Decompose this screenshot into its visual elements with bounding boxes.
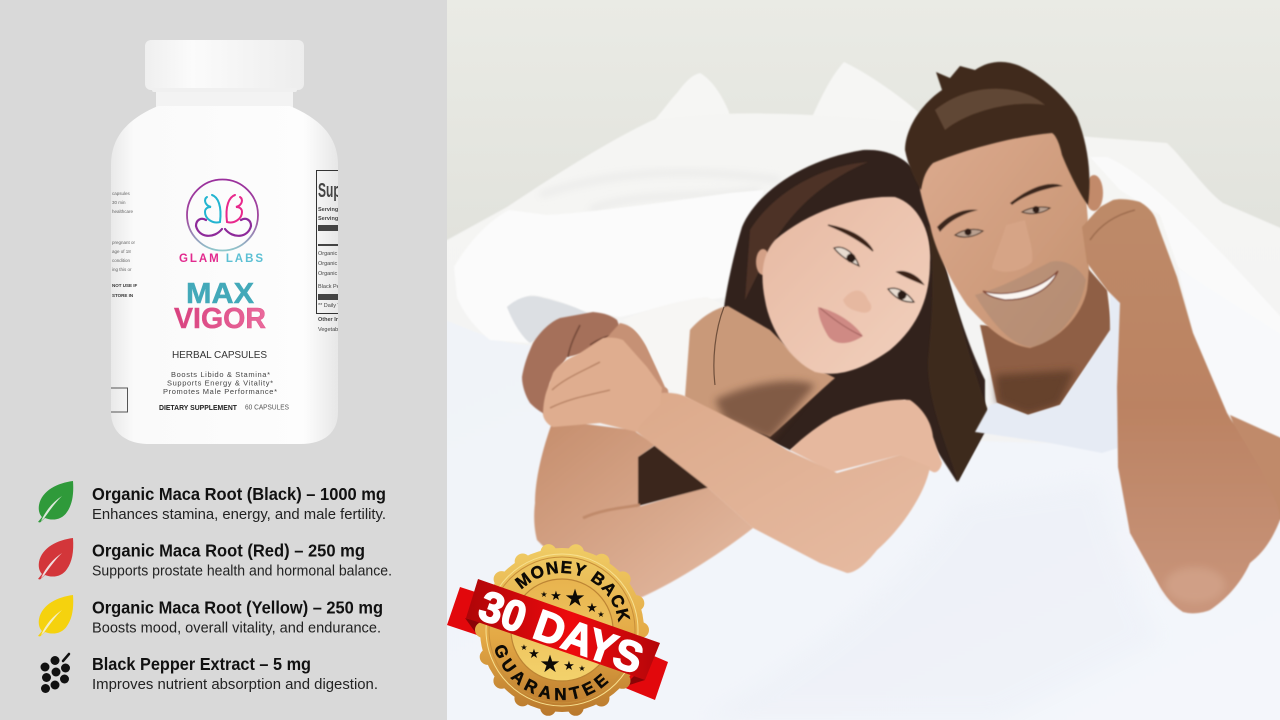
bottle side warning text: NOT USE IF [112, 283, 138, 288]
supplement facts label: Servings Per [318, 216, 352, 222]
panel: product and ingredients [38, 40, 391, 693]
supplement facts label [316, 170, 338, 332]
near arm from elbow to crossing [534, 420, 753, 598]
product bottle [111, 40, 338, 444]
icon: green leaf [38, 481, 73, 522]
gold seal [480, 548, 644, 712]
bottle side warning text: pregnant or [112, 240, 136, 245]
woman's hair highlight [745, 162, 868, 300]
ingredient name: Organic Maca Root (Yellow) – 250 mg [92, 598, 383, 618]
product benefits: Supports Energy & Vitality* [167, 378, 273, 388]
far upper arm and forearm [625, 393, 930, 573]
product name: vigor: VIGOR [174, 303, 266, 335]
woman's front hair strand [927, 225, 990, 482]
elbow highlight [1165, 567, 1225, 603]
stars: ★ [586, 600, 598, 615]
duvet back [440, 113, 1280, 460]
bottle side warning text: STORE IN [112, 293, 133, 298]
stars: ★ [563, 658, 575, 673]
man's neck [980, 265, 1112, 415]
woman's shoulder [606, 322, 670, 394]
woman's arms [534, 338, 942, 598]
woman's face [762, 197, 930, 374]
man's hair [905, 62, 1090, 205]
stars: ★ [597, 610, 605, 619]
ingredient benefit: Supports prostate health and hormonal balance. [92, 563, 392, 580]
product benefits: Boosts Libido & Stamina* [171, 370, 270, 379]
ribbon tails [447, 587, 668, 700]
supplement facts label: Serving Size [318, 207, 351, 213]
bottle side warning text: healthcare [112, 209, 134, 214]
product name: max: MAX [186, 278, 255, 310]
stars: ★ [564, 585, 586, 612]
man's mouth [983, 271, 1058, 300]
stars: ★ [539, 651, 561, 678]
bottle neck [156, 88, 293, 112]
brand name: GLAM LABS [179, 253, 263, 265]
stars [520, 585, 605, 678]
stars: ★ [550, 588, 562, 603]
man's eyes [955, 206, 1050, 237]
man's right arm and fist [1082, 199, 1280, 613]
bottle body [111, 106, 338, 444]
supplement facts label: Organic Maca [318, 261, 353, 267]
product benefits: Promotes Male Performance* [163, 387, 277, 396]
man's eyebrows [937, 184, 1063, 232]
product type: HERBAL CAPSULES [172, 350, 267, 361]
man's hand on her shoulder [522, 312, 625, 415]
supplement facts label: Black Pepper [318, 284, 351, 290]
woman's nose [843, 291, 871, 313]
ingredient name: Black Pepper Extract – 5 mg [92, 654, 311, 674]
text: money back: MONEY BACK [514, 560, 630, 622]
bottle side warning text: capsules [112, 191, 131, 196]
ingredient list [38, 481, 392, 693]
duvet fold shadows [540, 173, 780, 210]
bed sheet [447, 459, 1280, 720]
bottle cap [145, 40, 304, 90]
woman's ear [756, 249, 770, 275]
man's hair highlight [935, 89, 1045, 130]
brand logo [187, 180, 258, 250]
upper arm behind [1230, 415, 1280, 530]
woman's chest and neck [685, 306, 835, 437]
stars: ★ [578, 664, 586, 673]
cap lip [152, 88, 297, 92]
text: guarantee: GUARANTEE [495, 645, 609, 700]
bottle side warning text: ing this or [112, 267, 132, 272]
pillow under man's arm [1090, 157, 1280, 345]
pillows [656, 62, 918, 122]
her hand [543, 338, 662, 432]
stars: ★ [520, 643, 528, 652]
man's stubble [975, 261, 1086, 347]
bottle side warning text: 30 min [112, 200, 126, 205]
ingredient: black maca [38, 481, 386, 523]
supplement facts label: Organic Maca [318, 251, 353, 257]
ingredient: yellow maca [38, 595, 383, 636]
forearm and fist [1082, 199, 1280, 613]
icon: yellow leaf [38, 595, 73, 636]
bottle side warning text [112, 191, 138, 298]
woman's eyebrows [828, 225, 923, 284]
supplement facts label: ** Daily Value [318, 303, 351, 309]
bottle footer [159, 402, 289, 412]
man's ear [1085, 175, 1103, 211]
other hand [790, 400, 942, 472]
ingredient benefit: Boosts mood, overall vitality, and endurance. [92, 620, 381, 636]
sheet shadow [700, 480, 1160, 720]
text: 30 days: 30 DAYS [473, 582, 649, 684]
woman's eyes [834, 247, 914, 302]
supplement facts label: Vegetable Capsule [318, 327, 364, 333]
ingredient: red maca [38, 538, 392, 580]
ingredient name: Organic Maca Root (Black) – 1000 mg [92, 484, 386, 504]
shirt on the right side [1256, 326, 1267, 333]
stars: ★ [528, 646, 540, 661]
badge: 30 days money back guarantee [447, 544, 668, 716]
ingredient: black pepper [40, 654, 378, 693]
man's neck shadow [995, 370, 1075, 415]
supplement facts label: Supp [318, 180, 348, 202]
shadow under duvet fold [507, 296, 590, 343]
man's face [920, 130, 1089, 348]
ingredient name: Organic Maca Root (Red) – 250 mg [92, 541, 365, 561]
duvet front fold [488, 191, 762, 340]
icon: red leaf [38, 538, 73, 580]
hair under arm [638, 444, 710, 506]
woman's shoulder strap shadow [714, 307, 724, 385]
stars: ★ [540, 590, 548, 599]
ingredient benefit: Improves nutrient absorption and digestion. [92, 676, 378, 693]
bottle side barcode box [111, 388, 128, 412]
man's nose [992, 220, 1032, 272]
elbow crease shading [583, 505, 640, 518]
supplement facts label: Other Ingredients [318, 317, 364, 323]
bottle side warning text: condition [112, 258, 131, 263]
bottle footer: 60 CAPSULES [245, 402, 289, 412]
man's white T-shirt [975, 293, 1122, 453]
woman's chest shadow [715, 381, 815, 440]
bottle footer: DIETARY SUPPLEMENT [159, 403, 237, 412]
woman's lips [818, 307, 863, 343]
bottle side warning text: age of 18 [112, 249, 131, 254]
photo: couple lying on bed [447, 0, 1280, 720]
icon: peppercorns [40, 654, 70, 693]
product benefits [163, 370, 277, 396]
ingredient benefit: Enhances stamina, energy, and male fertility. [92, 506, 386, 523]
wall [447, 0, 1280, 238]
supplement facts label: Organic Maca [318, 271, 353, 277]
ribbon band [466, 579, 660, 680]
woman's white top [632, 304, 724, 389]
woman's back hair [720, 150, 985, 482]
